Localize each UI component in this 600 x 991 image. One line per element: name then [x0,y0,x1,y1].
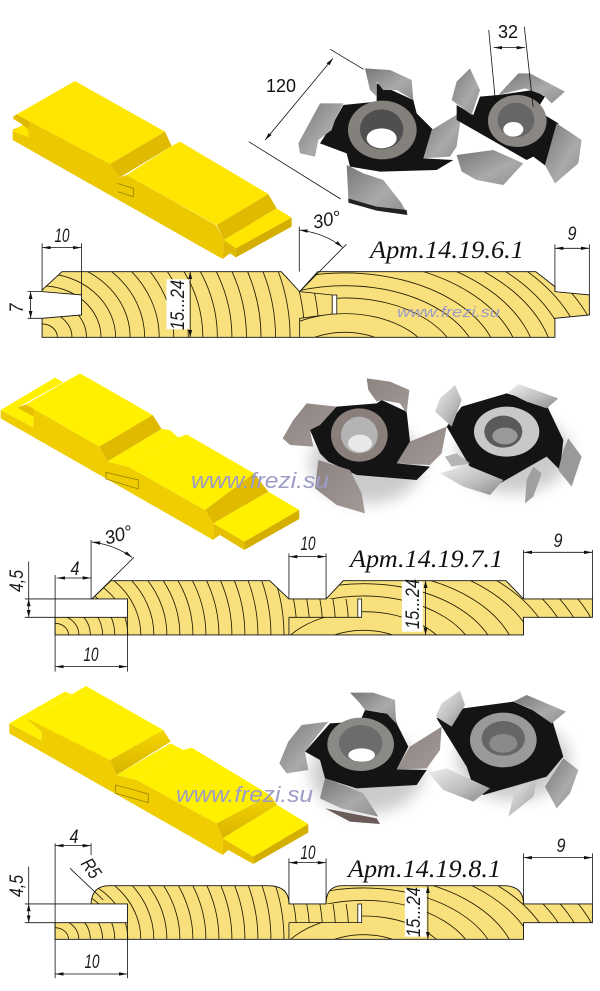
dimension labels 2: 9 [554,531,563,552]
right cutter [428,691,578,817]
left cutter [283,378,447,513]
cutters photo 1 [298,68,582,215]
dimension labels 1: 32 [498,22,518,42]
wood grain right [300,272,588,337]
isometric board 1 [12,81,292,259]
wood grain left [56,581,349,634]
profile drawing 3 [24,843,593,978]
dimension labels 3 [7,827,566,973]
right cutter [435,384,582,503]
soft shadow [310,720,570,813]
watermark 3: www.frezi.su [176,782,313,807]
dimension labels 1: 30° [311,207,343,234]
dimension labels 2: 4,5 [7,570,28,592]
dimension labels 3: 10 [84,952,100,973]
wood grain left [56,886,349,939]
dimension labels 2: 15...24 [403,579,424,629]
right cutter [452,68,582,185]
dimension labels 2: 30° [102,522,135,549]
dimension labels 3: 9 [556,836,566,857]
cutters photo 3 [279,691,578,824]
isometric board 2 [1,373,299,550]
dimension labels 1 [7,22,577,330]
dimension labels 1: 120 [266,76,296,96]
left cutter [298,68,462,215]
panel: profile 14.19.7.1 [0,373,593,672]
dimension labels 3: R5 [76,855,105,883]
dimension labels 1: 9 [568,224,577,245]
dimension labels 3: 4,5 [7,875,28,897]
left cutter [279,693,442,824]
isometric board 3 [9,686,308,864]
article number 3: Арт.14.19.8.1 [346,856,501,883]
wood grain left [42,272,318,337]
profile drawing 2 [24,540,593,672]
wood grain right [290,886,592,939]
article number 2: Арт.14.19.7.1 [348,546,503,573]
dimension labels 2 [7,522,563,666]
soft shadow [310,413,570,503]
dimension lines 1 [249,27,533,199]
dimension labels 1: 7 [7,302,28,312]
dimension labels 1: 10 [54,226,70,247]
dimension labels 2: 10 [84,645,99,666]
article number 1: Арт.14.19.6.1 [368,237,524,264]
panel: profile 14.19.6.1 [10,25,590,338]
dimension labels 2: 10 [300,534,316,555]
watermark 2: www.frezi.su [191,468,329,493]
wood grain right [290,581,591,634]
watermark 1: www.frezi.su [397,304,501,321]
cutters photo 2 [283,378,582,513]
dimension labels 1: 15...24 [168,280,189,330]
profile drawing 1 [28,226,590,338]
dimension labels 3: 4 [70,827,78,848]
dimension labels 2: 4 [70,559,80,580]
panel: profile 14.19.8.1 [7,683,600,978]
dimension labels 3: 15...24 [404,887,425,937]
dimension labels 3: 10 [300,843,316,864]
